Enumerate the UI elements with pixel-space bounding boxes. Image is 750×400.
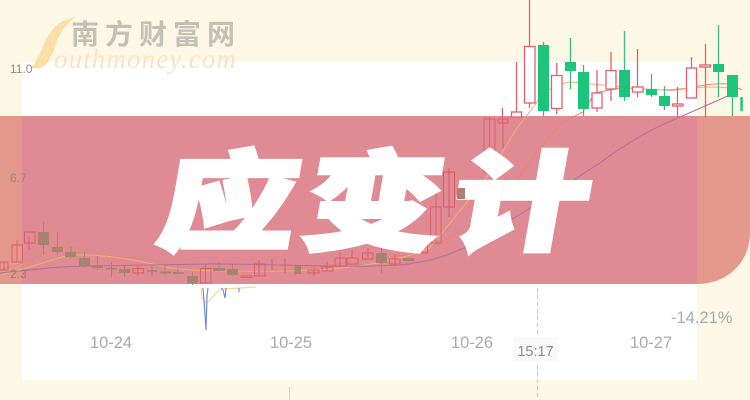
watermark Chinese name: 南方财富网: [71, 13, 241, 53]
x axis date labels: 10-27: [630, 334, 672, 352]
title: [149, 117, 605, 272]
white chart panel: [22, 62, 697, 380]
y axis labels: 11.0: [10, 62, 33, 76]
red candles in band: [0, 117, 508, 283]
watermark: southmoney logo: [30, 13, 241, 74]
candlestick chart: [0, 0, 743, 285]
title: 应: [149, 117, 313, 272]
x axis date labels: 10-25: [270, 334, 312, 352]
brown candle over title: [457, 188, 465, 199]
title: 变: [294, 117, 458, 272]
green candles on white: [538, 25, 743, 116]
crosshair dashed line: [536, 288, 538, 400]
yellow average line: [201, 287, 256, 303]
title: 计: [441, 117, 605, 272]
x axis date labels: [90, 334, 672, 352]
y axis labels: [10, 62, 33, 281]
x axis date labels: 10-24: [90, 334, 132, 352]
pink title band: [0, 116, 750, 284]
crosshair time label: [513, 337, 558, 362]
blue price spike: [203, 288, 239, 330]
line: middle moving average: [0, 82, 730, 275]
percent change label: -14.21%: [671, 309, 733, 327]
icon: S swoosh: [30, 17, 76, 68]
red candle over title: [448, 168, 450, 217]
line: long moving average: [0, 95, 730, 273]
watermark url: outhmoney.com: [54, 44, 237, 74]
y axis labels: 6.7: [10, 171, 27, 185]
brown candles in band: [38, 222, 414, 285]
band over cream: [0, 116, 750, 284]
red candles on white: [502, 0, 710, 123]
moving average lines: [0, 82, 742, 275]
crosshair time label: 15:17: [517, 344, 554, 360]
band over white panel: [22, 116, 697, 284]
volume spikes below band: [201, 287, 256, 330]
line: short moving average: [0, 84, 742, 272]
y axis labels: 2.3: [10, 267, 27, 281]
x axis date labels: 10-26: [451, 334, 493, 352]
candles overlapping title: [444, 168, 465, 217]
